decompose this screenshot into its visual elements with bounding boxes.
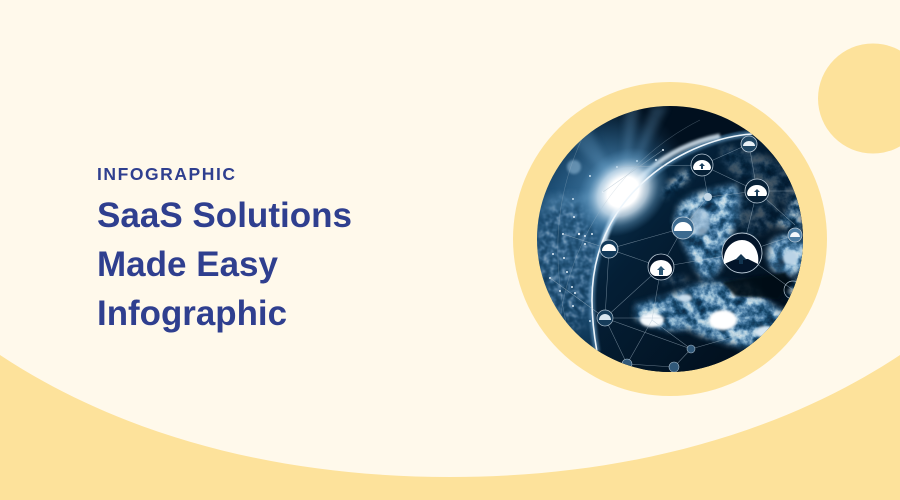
- node: [622, 358, 632, 366]
- lens flare: [567, 160, 581, 174]
- node: [669, 362, 679, 372]
- globe badge: [513, 82, 827, 396]
- cloud band base tone: [636, 283, 790, 348]
- node: [600, 240, 618, 258]
- bottom wave band: [0, 355, 900, 500]
- eyebrow label: INFOGRAPHIC: [97, 164, 235, 184]
- node: [745, 179, 769, 203]
- earth surface and clouds: [630, 144, 803, 352]
- sun glare: [581, 150, 667, 234]
- globe photo: [530, 100, 810, 380]
- network links: [550, 105, 803, 367]
- node: [672, 217, 694, 239]
- decorative corner circle: [818, 44, 900, 154]
- node: [722, 233, 762, 273]
- hurricane base tone: [768, 235, 808, 275]
- sun rays: [540, 106, 668, 215]
- atmospheric limb: [592, 134, 752, 352]
- node: [741, 136, 757, 152]
- text block: headline: [97, 164, 352, 333]
- bright cloud highlights: [640, 208, 797, 338]
- cloud nodes: [597, 136, 802, 372]
- atmospheric limb glow: [592, 134, 752, 352]
- mottled land and cloud texture: [632, 144, 803, 349]
- space backdrop: [530, 100, 810, 380]
- node: [784, 280, 796, 298]
- blue halo around sun: [552, 114, 675, 237]
- node: [648, 254, 674, 280]
- node: [788, 228, 802, 242]
- title: [97, 195, 352, 333]
- star field: [549, 149, 664, 322]
- node: [597, 310, 613, 326]
- mottled star field: [537, 194, 598, 332]
- node: [691, 154, 713, 176]
- earth disc: [592, 130, 803, 372]
- title: SaaS Solutions: [97, 195, 352, 235]
- title: Infographic: [97, 293, 287, 333]
- node: [687, 345, 695, 353]
- node: [704, 193, 712, 201]
- yellow ring: [513, 82, 827, 396]
- dark storm gaps: [722, 272, 792, 300]
- title: Made Easy: [97, 244, 278, 284]
- land base tone: [675, 185, 739, 280]
